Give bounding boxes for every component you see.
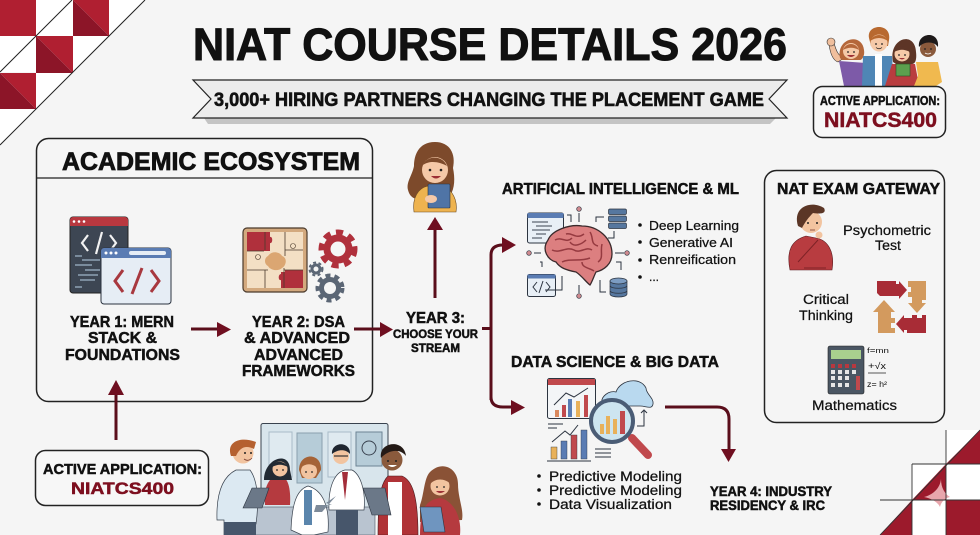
icon: calculator with formulas: z= h² xyxy=(867,380,887,389)
ribbon banner: 3,000+ HIRING PARTNERS CHANGING THE PLACEMENT GAME xyxy=(214,90,764,111)
text: critical thinking: Critical xyxy=(803,292,849,307)
text: year 2 xyxy=(242,314,355,380)
illustration: student girl holding book xyxy=(408,142,456,212)
text: year 4 industry residency xyxy=(710,484,832,513)
woman in red, dark hair xyxy=(264,459,292,505)
text: year 3 choose your stream: CHOOSE YOUR xyxy=(393,327,478,341)
text: year 2: FRAMEWORKS xyxy=(242,363,355,380)
text: year 4 industry residency: YEAR 4: INDUSTRY xyxy=(710,484,832,499)
text: year 2: ADVANCED xyxy=(254,347,343,364)
list: ai topics: Renreification xyxy=(649,252,736,267)
icon: chart window xyxy=(548,378,596,418)
icon: puzzle arrows xyxy=(873,281,926,333)
text: year 1: YEAR 1: MERN xyxy=(70,314,174,331)
callout: active application, bottom left xyxy=(36,450,208,506)
icon: data analytics with magnifier xyxy=(547,378,653,461)
title: NIAT COURSE DETAILS 2026 xyxy=(193,19,787,70)
arrow: data science to year 4 xyxy=(665,407,736,462)
heading: academic ecosystem: ACADEMIC ECOSYSTEM xyxy=(62,148,360,176)
illustration: group of four students, top right xyxy=(827,27,942,86)
callout: active application, top right xyxy=(814,86,946,138)
icon: brain with connected nodes xyxy=(527,207,629,298)
text: year 4 industry residency: RESIDENCY & IRC xyxy=(710,498,825,513)
text: year 2: & ADVANCED xyxy=(244,330,350,347)
text: psychometric test: Test xyxy=(875,238,901,253)
decoration: top-left geometric squares xyxy=(0,0,145,145)
list: ai topics: ... xyxy=(649,269,659,284)
icon: code windows xyxy=(70,217,171,304)
text: year 3 choose your stream: YEAR 3: xyxy=(406,310,465,327)
icon: puzzle and gears xyxy=(243,228,354,300)
callout: active application, bottom left: NIATCS400 xyxy=(71,479,174,498)
icon: server stack xyxy=(608,209,626,228)
scientist man with glasses xyxy=(329,444,364,535)
man in red open shirt with tablet xyxy=(363,444,418,535)
ribbon banner xyxy=(193,80,787,124)
callout: active application, top right: ACTIVE APPLICATION: xyxy=(820,93,940,108)
arrow: year 2 to year 3 xyxy=(354,322,393,337)
icon: brain xyxy=(545,226,612,285)
text: year 1: FOUNDATIONS xyxy=(65,347,180,364)
icon: code window xyxy=(528,274,556,296)
list: ai topics xyxy=(638,218,739,284)
list: ai topics: Generative AI xyxy=(649,235,733,250)
display board xyxy=(261,424,388,514)
illustration: team of students and researchers at dashboard xyxy=(217,424,462,535)
text: psychometric test xyxy=(843,223,931,253)
icon: cloud xyxy=(602,381,653,407)
decoration: bottom-right geometric squares xyxy=(880,430,980,535)
icon: document window xyxy=(528,213,564,243)
heading: nat exam gateway: NAT EXAM GATEWAY xyxy=(777,181,941,198)
panel: academic ecosystem xyxy=(36,138,372,402)
text: critical thinking: Thinking xyxy=(799,308,853,323)
scientist woman in white coat xyxy=(291,456,336,535)
text: year 3 choose your stream xyxy=(393,310,478,355)
text: year 1: STACK & xyxy=(88,330,157,347)
heading: artificial intelligence and ml: ARTIFICIAL INTELLIGENCE & ML xyxy=(502,181,739,198)
icon: lower bar chart xyxy=(547,424,611,461)
text: year 3 choose your stream: STREAM xyxy=(411,341,460,355)
list: data science topics: Data Visualization xyxy=(549,497,672,512)
text: year 2: YEAR 2: DSA xyxy=(252,314,345,331)
text: year 1 xyxy=(65,314,180,364)
man in light blue shirt with tablet xyxy=(217,440,269,535)
arrow: active application up to academic ecosystem xyxy=(108,380,124,440)
list: ai topics: Deep Learning xyxy=(649,218,739,233)
icon: database xyxy=(610,278,627,297)
list: data science topics xyxy=(537,469,682,512)
heading: data science and big data: DATA SCIENCE & BIG DATA xyxy=(511,354,719,371)
callout: active application, bottom left: ACTIVE APPLICATION: xyxy=(43,461,202,478)
list: data science topics: Predictive Modeling xyxy=(549,483,682,498)
text: mathematics: Mathematics xyxy=(812,398,897,413)
table xyxy=(252,507,375,535)
icon: calculator with formulas xyxy=(828,346,889,394)
text: critical thinking xyxy=(799,292,853,323)
list: data science topics: Predictive Modeling xyxy=(549,469,682,484)
icon: calculator with formulas: f=mn xyxy=(867,346,889,355)
icon: magnifying glass xyxy=(591,400,648,455)
panel: nat exam gateway xyxy=(764,170,944,422)
callout: active application, top right: NIATCS400 xyxy=(824,109,937,132)
icon: calculator with formulas: +√x xyxy=(868,361,887,371)
woman in red with blue tablet xyxy=(420,466,462,535)
icon: thinking man xyxy=(789,205,833,270)
arrow: year 3 up to student xyxy=(427,217,443,298)
text: psychometric test: Psychometric xyxy=(843,223,931,238)
connector: branch to both streams xyxy=(482,237,525,415)
arrow: year 1 to year 2 xyxy=(191,322,231,337)
